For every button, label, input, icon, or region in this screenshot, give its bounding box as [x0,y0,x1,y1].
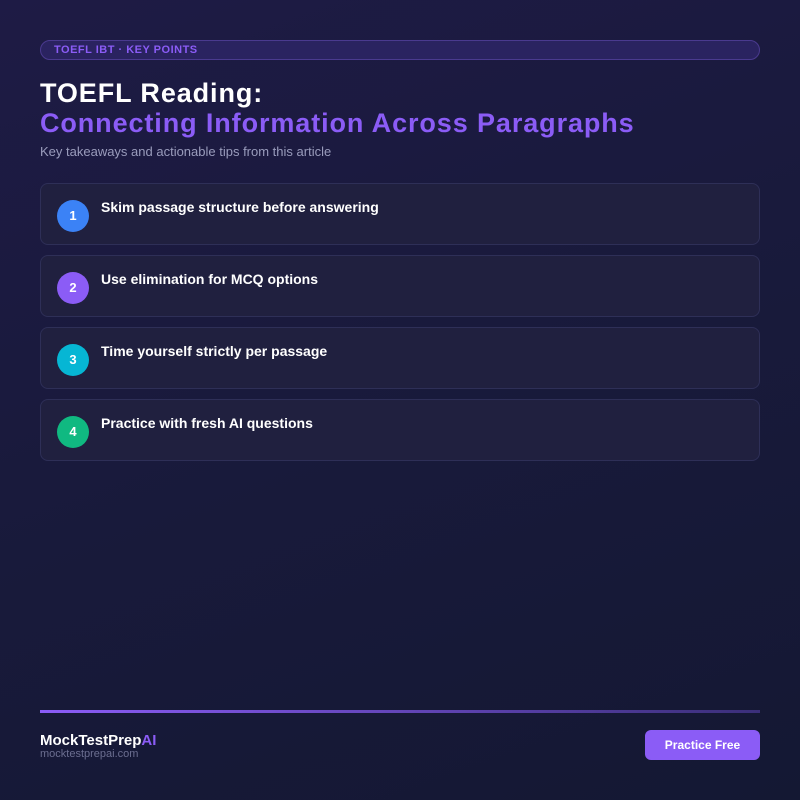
card 1: 1 [69,208,77,223]
title: TOEFL Reading: [40,78,263,108]
card 2 [40,255,760,317]
button: Practice Free [665,738,740,752]
card 4 [40,399,760,461]
tag pill: TOEFL IBT · KEY POINTS [54,44,198,56]
brand: MockTestPrepAI [40,732,156,749]
card 2: 2 [69,280,77,295]
tag pill [40,40,760,60]
card 4: 4 [69,424,77,439]
card 1 [40,183,760,245]
card 3 [40,327,760,389]
card 4: Practice with fresh AI questions [101,415,313,431]
card 2: Use elimination for MCQ options [101,271,318,287]
card 3: Time yourself strictly per passage [101,343,327,359]
card 1: Skim passage structure before answering [101,199,379,215]
card 3: 3 [69,352,77,367]
title accent: Connecting Information Across Paragraphs [40,108,635,138]
button [645,730,760,760]
url: mocktestprepai.com [40,748,138,760]
subtitle: Key takeaways and actionable tips from this article [40,144,331,159]
